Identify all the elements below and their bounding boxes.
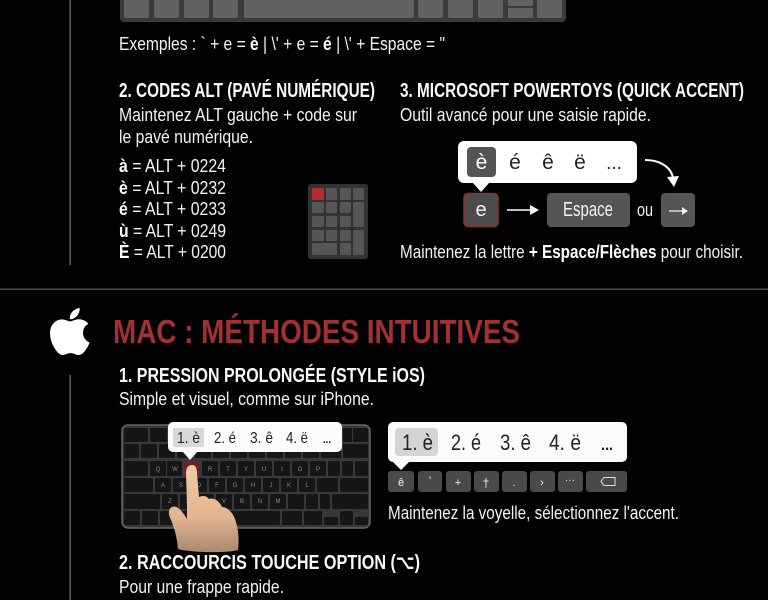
Mac keyboard: J bbox=[270, 483, 272, 489]
heading: long press: 1. PRESSION PROLONGÉE (STYLE iOS) bbox=[119, 364, 425, 387]
accent popup: ... bbox=[606, 153, 622, 174]
ALT code list: è = ALT + 0232 bbox=[119, 178, 226, 198]
heading: ALT codes: 2. CODES ALT (PAVÉ NUMÉRIQUE) bbox=[119, 79, 375, 102]
arrow: curved bbox=[645, 160, 679, 187]
popup: numbered accents: 2. é bbox=[214, 430, 236, 447]
key: e bbox=[464, 194, 498, 226]
popup: numbered accents: 3. ê bbox=[250, 430, 273, 447]
key: Espace: Espace bbox=[563, 199, 613, 221]
popup: large numbered accents bbox=[388, 422, 627, 470]
PowerToys description: Outil avancé pour une saisie rapide. bbox=[400, 105, 651, 125]
ALT code list: ù = ALT + 0249 bbox=[119, 221, 226, 241]
Mac keyboard: M bbox=[276, 499, 280, 505]
Mac keyboard: Z bbox=[168, 499, 172, 505]
popup: numbered accents bbox=[168, 422, 342, 460]
popup: large numbered accents: 3. ê bbox=[500, 430, 531, 455]
popup: large numbered accents: 4. ë bbox=[549, 430, 581, 455]
long press description: Simple et visuel, comme sur iPhone. bbox=[119, 389, 374, 409]
Mac keyboard: G bbox=[233, 483, 238, 489]
keyboard illustration (top) bbox=[120, 0, 566, 22]
key row: ê bbox=[398, 477, 404, 489]
section: PowerToys bbox=[400, 80, 744, 262]
illustration: Mac keyboard with popup and hand bbox=[122, 422, 370, 552]
key row: ' bbox=[429, 475, 431, 487]
Mac keyboard: I bbox=[281, 467, 283, 473]
icon: numeric keypad bbox=[308, 184, 368, 259]
heading: option shortcuts: 2. RACCOURCIS TOUCHE OPTION (⌥) bbox=[119, 552, 420, 574]
accent popup: é bbox=[509, 151, 521, 174]
Mac keyboard: H bbox=[251, 483, 255, 489]
Mac keyboard: D bbox=[197, 483, 202, 489]
key: Espace bbox=[547, 193, 630, 227]
illustration: iOS-style popup with key row bbox=[388, 422, 679, 523]
ALT description bbox=[119, 105, 357, 147]
ALT code list: È = ALT + 0200 bbox=[119, 241, 226, 262]
Mac keyboard: B bbox=[240, 499, 244, 505]
Mac keyboard: C bbox=[204, 499, 209, 505]
key row bbox=[388, 471, 627, 492]
Mac keyboard: L bbox=[305, 483, 309, 489]
popup: numbered accents: 4. ë bbox=[286, 430, 308, 447]
Mac keyboard: A bbox=[161, 483, 165, 489]
accent popup: ê bbox=[542, 151, 554, 174]
Mac keyboard: U bbox=[262, 467, 266, 473]
option description: Pour une frappe rapide. bbox=[119, 577, 284, 597]
long press caption: Maintenez la voyelle, sélectionnez l'accent. bbox=[388, 503, 679, 523]
Mac keyboard: R bbox=[208, 467, 213, 473]
label: ou: ou bbox=[637, 200, 653, 220]
popup: numbered accents: 1. è bbox=[177, 430, 200, 447]
Mac keyboard bbox=[122, 425, 370, 528]
Mac keyboard: W bbox=[172, 467, 178, 473]
ALT description: Maintenez ALT gauche + code sur bbox=[119, 105, 357, 125]
Mac keyboard: Q bbox=[156, 467, 161, 473]
ALT code list: à = ALT + 0224 bbox=[119, 156, 226, 176]
key row: . bbox=[512, 477, 516, 489]
Mac keyboard: F bbox=[215, 483, 219, 489]
popup: large numbered accents: 1. è bbox=[402, 430, 433, 455]
panel: Windows methods bbox=[70, 0, 744, 265]
key row: › bbox=[540, 477, 544, 489]
Mac keyboard: O bbox=[298, 467, 303, 473]
popup: large numbered accents: 2. é bbox=[451, 430, 481, 455]
PowerToys caption: Maintenez la lettre + Espace/Flèches pour choisir. bbox=[400, 242, 743, 262]
section: ALT codes bbox=[119, 79, 375, 262]
accent popup bbox=[458, 141, 637, 192]
panel: Mac methods bbox=[50, 308, 679, 600]
Mac keyboard: P bbox=[316, 467, 320, 473]
key row: ··· bbox=[565, 475, 575, 486]
Mac keyboard: V bbox=[222, 499, 226, 505]
key: arrow right bbox=[661, 193, 695, 227]
key row: † bbox=[483, 476, 489, 490]
examples line: Exemples : ` + e = è | \' + e = é | \' + Espace = " bbox=[119, 34, 445, 54]
Mac keyboard: X bbox=[186, 499, 190, 505]
Mac keyboard: K bbox=[287, 483, 291, 489]
accent popup: è bbox=[476, 151, 487, 174]
ALT code list: é = ALT + 0233 bbox=[119, 199, 226, 219]
key row: + bbox=[455, 477, 461, 489]
divider bbox=[0, 288, 768, 290]
Mac keyboard: Y bbox=[244, 467, 248, 473]
Mac keyboard: S bbox=[179, 483, 183, 489]
arrow: e to Espace bbox=[507, 205, 539, 215]
Mac keyboard: N bbox=[258, 499, 262, 505]
ALT code list bbox=[119, 156, 226, 262]
title: Mac: MAC : MÉTHODES INTUITIVES bbox=[113, 313, 520, 350]
popup: large numbered accents: ... bbox=[600, 430, 614, 455]
Mac keyboard: T bbox=[226, 467, 230, 473]
key: e: e bbox=[475, 199, 487, 221]
popup: numbered accents: ... bbox=[322, 430, 332, 447]
ALT description: le pavé numérique. bbox=[119, 127, 253, 147]
hand pressing key bbox=[169, 465, 239, 552]
icon: apple logo bbox=[50, 308, 90, 355]
accent popup: ë bbox=[574, 151, 586, 174]
